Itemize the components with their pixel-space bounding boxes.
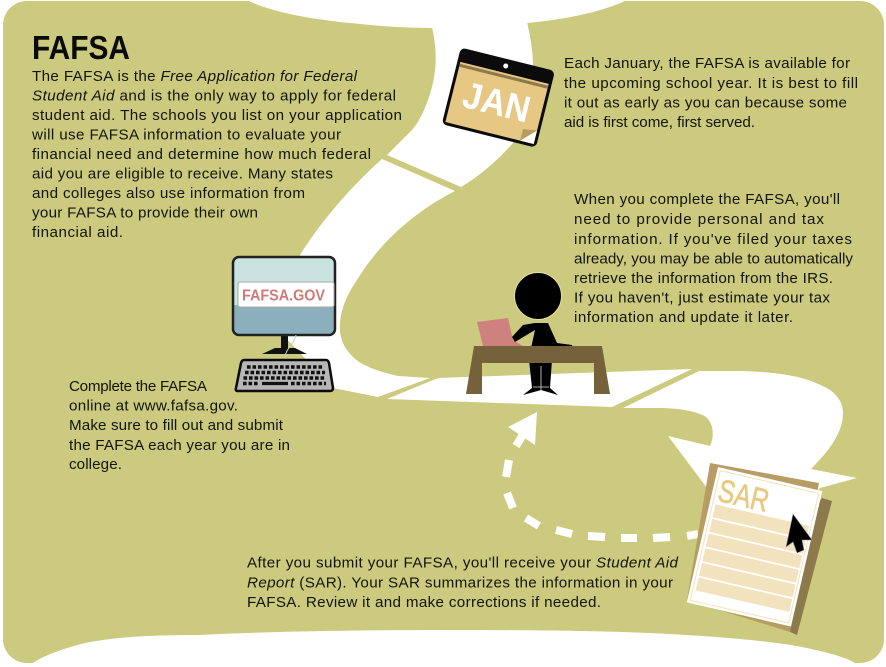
text block: personal and tax information: If you haven't, just estimate your tax bbox=[574, 290, 830, 306]
text block: FAFSA introduction: financial need and determine how much federal bbox=[32, 146, 371, 163]
text block: January availability: it out as early as you can because some bbox=[564, 94, 847, 112]
text block: January availability: aid is first come, first served. bbox=[564, 114, 755, 131]
text block: complete online: the FAFSA each year you are in bbox=[69, 437, 290, 454]
text block: student aid report: FAFSA. Review it and make corrections if needed. bbox=[247, 594, 601, 611]
text block: FAFSA introduction: student aid. The schools you list on your application bbox=[32, 107, 402, 124]
text block: January availability bbox=[564, 55, 858, 131]
text block: student aid report bbox=[247, 554, 679, 611]
text block: personal and tax information bbox=[574, 191, 853, 326]
text block: personal and tax information: information and update it later. bbox=[574, 309, 793, 326]
icon: computer with FAFSA.GOV bbox=[233, 257, 335, 391]
desk bbox=[466, 346, 610, 394]
keyboard bbox=[236, 360, 333, 391]
laptop bbox=[477, 318, 523, 346]
text block: student aid report: After you submit your FAFSA, you'll receive your Student Aid bbox=[247, 554, 679, 572]
road: top ellipse bbox=[247, 0, 627, 28]
text block: personal and tax information: need to provide personal and tax bbox=[574, 211, 824, 228]
text block: FAFSA introduction: The FAFSA is the Free Application for Federal bbox=[32, 68, 358, 85]
text block: complete online: Complete the FAFSA bbox=[69, 378, 208, 395]
text block: FAFSA introduction: and colleges also use information from bbox=[32, 185, 305, 202]
text block: FAFSA introduction: aid you are eligible to receive. Many states bbox=[32, 166, 333, 182]
icon: cursor bbox=[786, 514, 812, 553]
title: FAFSA bbox=[32, 29, 130, 66]
road: segment 3 bbox=[387, 369, 692, 407]
person bbox=[512, 272, 573, 395]
text block: January availability: Each January, the FAFSA is available for bbox=[564, 55, 850, 72]
computer stand bbox=[262, 335, 307, 354]
text block: FAFSA introduction: your FAFSA to provide their own bbox=[32, 204, 258, 222]
text block: personal and tax information: When you complete the FAFSA, you'll bbox=[574, 191, 840, 208]
icon: person at desk bbox=[466, 272, 610, 395]
road: bottom ellipse bbox=[31, 630, 858, 667]
text block: personal and tax information: information. If you've filed your taxes bbox=[574, 231, 852, 248]
text block: FAFSA introduction: financial aid. bbox=[32, 224, 123, 241]
text block: FAFSA introduction: Student Aid and is the only way to apply for federal bbox=[32, 88, 396, 105]
text block: complete online bbox=[69, 378, 290, 473]
icon: JAN calendar: JAN bbox=[459, 74, 535, 130]
text block: personal and tax information: retrieve the information from the IRS. bbox=[574, 270, 833, 287]
arrow: dashed path back to the desk bbox=[506, 412, 698, 538]
text block: complete online: online at www.fafsa.gov. bbox=[69, 398, 238, 414]
icon: SAR document: SAR bbox=[715, 472, 773, 519]
document stripes bbox=[696, 504, 809, 612]
text block: FAFSA introduction: will use FAFSA information to evaluate your bbox=[31, 126, 341, 144]
text block: FAFSA introduction bbox=[31, 68, 402, 241]
icon: SAR document bbox=[687, 463, 832, 635]
text block: complete online: Make sure to fill out and submit bbox=[69, 417, 284, 434]
text block: complete online: college. bbox=[69, 456, 122, 473]
monitor: FAFSA.GOV bbox=[242, 288, 325, 304]
road: segment 1 bbox=[387, 22, 533, 187]
icon: JAN calendar bbox=[442, 48, 555, 148]
text block: personal and tax information: already, you may be able to automatically bbox=[574, 250, 853, 268]
text block: January availability: the upcoming school year. It is best to fill bbox=[564, 75, 858, 92]
road: segment 4 with arrowhead bbox=[623, 371, 857, 540]
road: segment 2 bbox=[283, 159, 455, 397]
text block: student aid report: Report (SAR). Your SAR summarizes the information in your bbox=[247, 574, 673, 592]
